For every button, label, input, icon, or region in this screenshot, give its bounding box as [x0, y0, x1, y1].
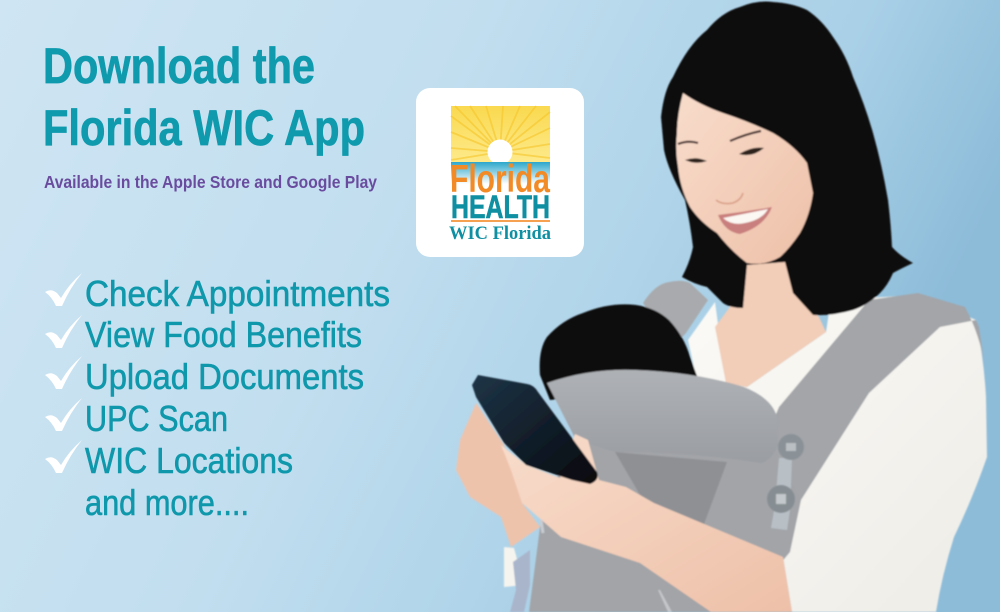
eyes — [685, 148, 764, 163]
item: WIC Locations: WIC Locations — [85, 440, 293, 481]
title: Florida WIC App — [43, 100, 365, 156]
app icon: Florida Health WIC logo: WIC Florida — [449, 223, 551, 244]
carrier head pad — [547, 370, 778, 463]
title — [43, 38, 365, 156]
item: View Food Benefits: View Food Benefits — [85, 314, 362, 355]
item: UPC Scan: UPC Scan — [85, 398, 228, 439]
item: and more: and more.... — [85, 482, 249, 523]
left hand — [456, 403, 540, 547]
carrier left strap — [643, 281, 708, 348]
carrier pocket — [615, 452, 727, 535]
item: Upload Documents: Upload Documents — [85, 356, 364, 397]
forearm and right hand — [501, 434, 792, 612]
carrier right strap — [777, 293, 985, 500]
item: Check Appointments: Check Appointments — [85, 273, 390, 314]
nose — [716, 193, 743, 204]
item: UPC Scan — [45, 398, 228, 439]
app icon: Florida Health WIC logo — [416, 88, 584, 257]
mouth — [718, 207, 772, 234]
carrier body — [529, 407, 801, 612]
carrier buttons — [767, 434, 804, 530]
baby hair — [540, 304, 697, 400]
hair — [661, 2, 913, 315]
app icon: Florida Health WIC logo: HEALTH — [451, 189, 550, 225]
logo sun panel — [451, 106, 550, 184]
face — [676, 93, 813, 264]
subtitle: Available in the Apple Store and Google Play — [44, 172, 377, 192]
title: Download the — [43, 38, 315, 94]
brows — [678, 131, 761, 144]
phone — [472, 375, 598, 484]
logo wordmark: Florida — [450, 158, 550, 201]
feature checklist — [45, 273, 390, 523]
shirt — [504, 295, 987, 612]
neck and chest — [715, 230, 826, 387]
ring — [541, 520, 543, 533]
photo: mother with baby in carrier using phone — [456, 2, 987, 612]
